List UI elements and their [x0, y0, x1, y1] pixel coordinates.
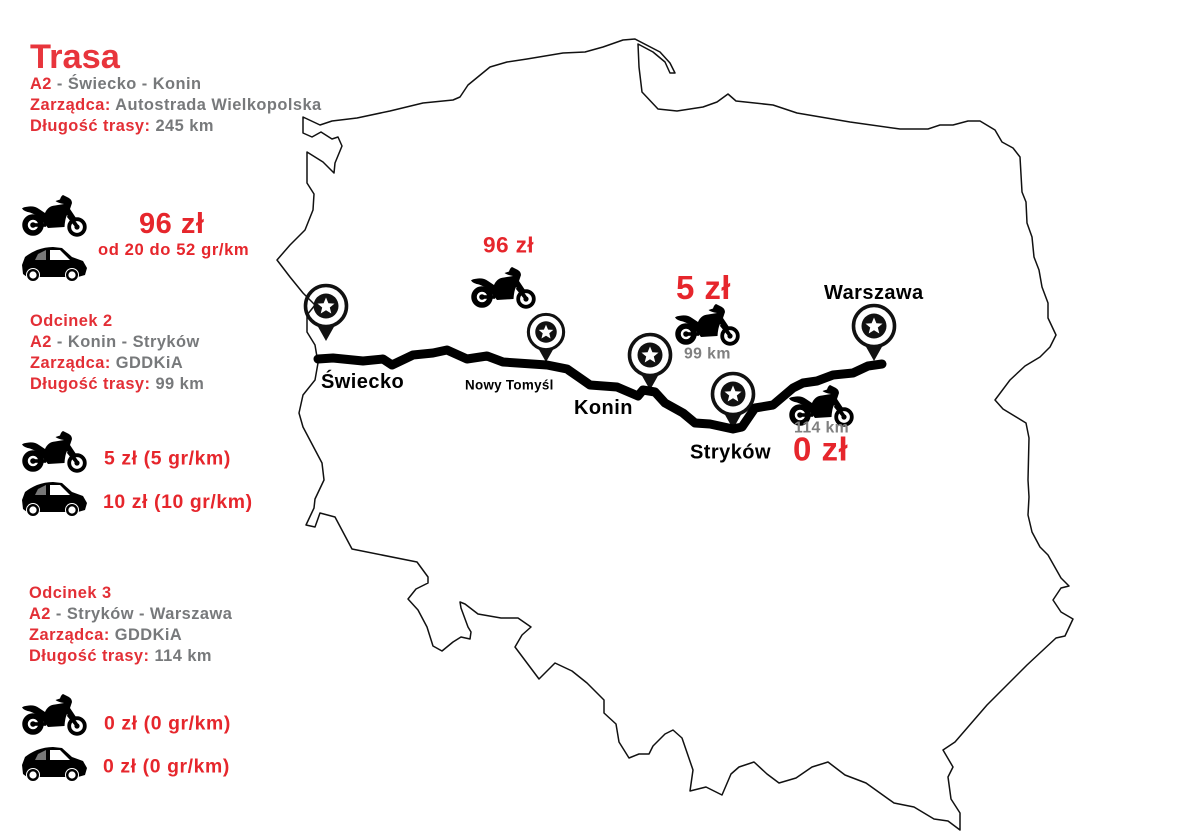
price label: 0 zł	[793, 430, 848, 468]
city label: Warszawa: Warszawa	[824, 282, 924, 304]
operator: Zarządca: Autostrada Wielkopolska	[30, 96, 322, 114]
operator: Zarządca: GDDKiA	[29, 626, 182, 644]
price label: 96 zł	[483, 232, 534, 258]
section heading: Odcinek 2	[30, 312, 113, 330]
city label: Świecko: Świecko	[321, 369, 404, 393]
motorcycle toll: 0 zł (0 gr/km)	[104, 712, 231, 734]
city label: Stryków: Stryków	[690, 442, 771, 464]
toll rate: od 20 do 52 gr/km	[98, 240, 249, 259]
car toll: 10 zł (10 gr/km)	[103, 491, 253, 513]
motorcycle toll: 5 zł (5 gr/km)	[104, 448, 231, 470]
icon: car	[22, 747, 87, 782]
icon: motorcycle	[22, 195, 85, 235]
pin: Konin	[630, 334, 670, 390]
map price: section 3	[789, 385, 852, 468]
distance label: 99 km	[684, 346, 731, 362]
map price: section 2	[675, 269, 738, 362]
route name: A2 - Stryków - Warszawa	[29, 605, 233, 623]
price label: 5 zł	[676, 269, 731, 306]
pin: Świecko	[306, 286, 346, 341]
operator: Zarządca: GDDKiA	[30, 354, 183, 372]
icon: motorcycle	[471, 267, 534, 307]
pin: Warszawa	[854, 306, 894, 361]
pin: Stryków	[712, 374, 754, 429]
map outline of Poland	[277, 39, 1073, 830]
title: Trasa	[30, 38, 121, 76]
city label: Nowy Tomyśl: Nowy Tomyśl	[465, 378, 554, 392]
icon: motorcycle	[675, 304, 738, 344]
route name: A2 - Konin - Stryków	[30, 333, 200, 351]
panel: route overview, section 1	[22, 38, 322, 282]
panel: section 2	[22, 312, 253, 517]
route length: Długość trasy: 99 km	[30, 375, 204, 393]
map price: section 1	[471, 232, 534, 307]
section heading: Odcinek 3	[29, 584, 112, 602]
pin: Nowy Tomyśl	[528, 314, 564, 362]
route name: A2 - Świecko - Konin	[30, 74, 202, 93]
car toll: 0 zł (0 gr/km)	[103, 756, 230, 778]
city label: Konin: Konin	[574, 397, 633, 419]
icon: motorcycle	[789, 385, 852, 425]
route length: Długość trasy: 245 km	[30, 117, 214, 135]
icon: motorcycle	[22, 431, 85, 471]
toll price: 96 zł	[139, 208, 204, 240]
icon: motorcycle	[22, 694, 85, 734]
icon: car	[22, 482, 87, 517]
panel: section 3	[22, 584, 233, 782]
route line: A2 motorway	[318, 350, 882, 429]
distance label: 114 km	[794, 420, 849, 436]
route length: Długość trasy: 114 km	[29, 647, 212, 665]
icon: car	[22, 247, 87, 282]
